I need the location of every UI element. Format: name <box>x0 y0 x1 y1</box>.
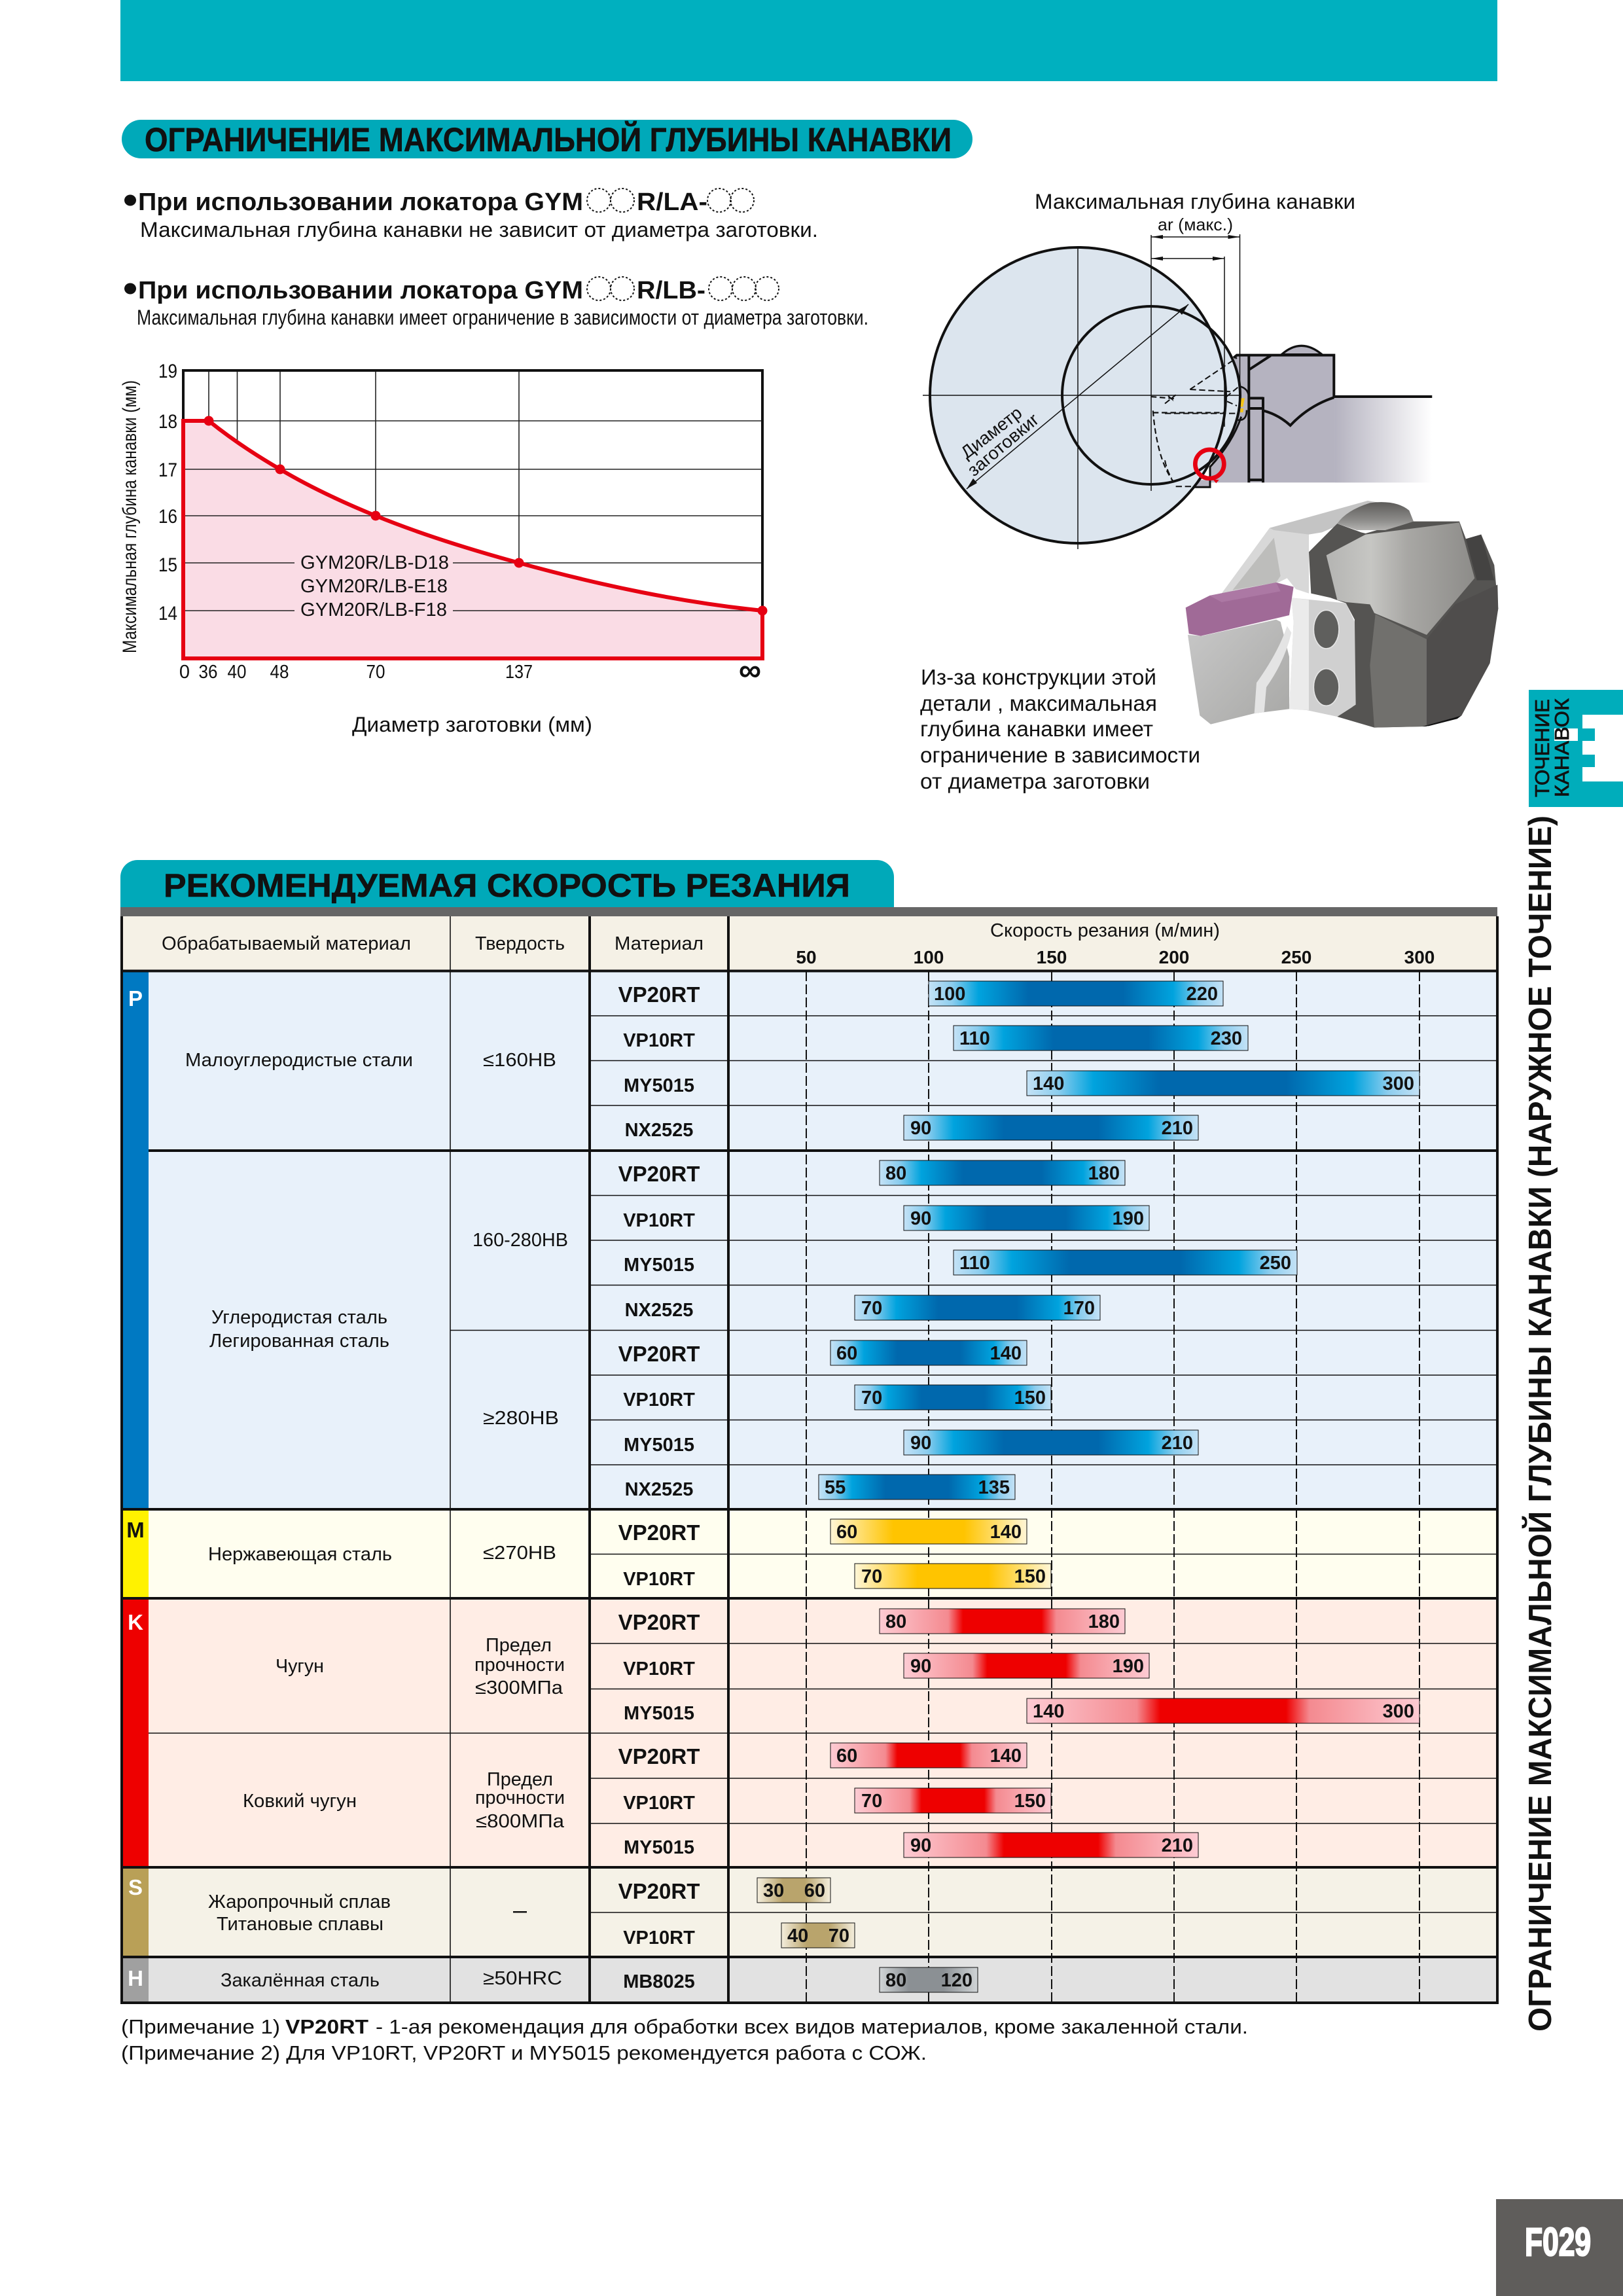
group strip: S <box>122 1867 149 1957</box>
row: NX2525 90-210: 90 <box>910 1118 931 1139</box>
text block: construction note: ограничение в зависимости <box>920 743 1200 767</box>
group strip: H <box>122 1957 149 2003</box>
row: S VP10RT 40-70 <box>623 1923 855 1948</box>
table header row: Скорость резания (м/мин) <box>990 920 1220 941</box>
material and hardness labels: Углеродистая сталь <box>211 1307 387 1328</box>
group strip: H: H <box>128 1966 143 1990</box>
row: S VP10RT 40-70: 70 <box>829 1926 849 1946</box>
table header row: 250 <box>1281 947 1311 967</box>
row: M VP10RT 70-150: 150 <box>1014 1566 1046 1587</box>
row: K MY5015 140-300 <box>624 1698 1419 1724</box>
row: K VP20RT 80-180: 80 <box>885 1611 906 1632</box>
chart: max groove depth vs workpiece diameter: GYM20R/LB-D18 <box>300 552 449 573</box>
row: S VP20RT 30-60: 60 <box>804 1880 825 1901</box>
row: MY5015 90-210 <box>624 1430 1198 1456</box>
table header row: 150 <box>1037 947 1067 967</box>
row: VP20RT 60-140: 60 <box>836 1343 857 1364</box>
row: K MY5015 90-210 <box>624 1833 1198 1858</box>
row: NX2525 70-170: NX2525 <box>625 1300 693 1321</box>
text block: construction note: глубина канавки имеет <box>920 717 1153 741</box>
row: NX2525 90-210: 210 <box>1162 1118 1193 1139</box>
row: MY5015 90-210: 90 <box>910 1433 931 1454</box>
vertical side title: ОГРАНИЧЕНИЕ МАКСИМАЛЬНОЙ ГЛУБИНЫ КАНАВКИ (НАРУЖНОЕ ТОЧЕНИЕ) <box>1522 816 1558 2032</box>
row: MY5015 90-210: 210 <box>1162 1433 1193 1454</box>
row: K VP10RT 70-150: 150 <box>1014 1791 1046 1812</box>
row: VP20RT 100-220: VP20RT <box>618 982 700 1007</box>
table header row: 200 <box>1159 947 1189 967</box>
row: K VP20RT 60-140: 60 <box>836 1746 857 1767</box>
notes <box>121 2015 1248 2064</box>
row: K VP10RT 70-150: 70 <box>861 1791 882 1812</box>
row: MY5015 140-300: 140 <box>1033 1073 1064 1094</box>
row: K VP10RT 90-190: VP10RT <box>623 1659 695 1679</box>
material and hardness labels: прочности <box>475 1787 565 1808</box>
top banner <box>120 0 1497 81</box>
text block: construction note: от диаметра заготовки <box>920 769 1150 793</box>
panel: K cast iron background <box>122 1598 1497 1867</box>
page number tab: F029 <box>1525 2220 1591 2264</box>
chart: max groove depth vs workpiece diameter: 36 <box>199 662 217 683</box>
material and hardness labels: 160-280HB <box>473 1230 568 1251</box>
heading: maximum groove depth limit: ОГРАНИЧЕНИЕ МАКСИМАЛЬНОЙ ГЛУБИНЫ КАНАВКИ <box>145 120 952 158</box>
table header row: 50 <box>796 947 817 967</box>
row: K VP20RT 80-180: 180 <box>1088 1611 1120 1632</box>
row: NX2525 55-135: NX2525 <box>625 1479 693 1500</box>
illustration: 3D holder <box>1186 501 1498 728</box>
group strip: K <box>122 1598 149 1867</box>
row: VP20RT 80-180 <box>618 1160 1125 1186</box>
row: MY5015 110-250: 110 <box>959 1253 990 1274</box>
text block: locator LA <box>124 188 818 242</box>
row: VP10RT 70-150 <box>623 1385 1051 1410</box>
chart: max groove depth vs workpiece diameter: GYM20R/LB-E18 <box>300 576 448 597</box>
panel: H hardened steel background <box>122 1957 1497 2003</box>
material and hardness labels: Малоуглеродистые стали <box>185 1050 413 1071</box>
material and hardness labels: Жаропрочный сплав <box>208 1892 391 1912</box>
row: MY5015 140-300 <box>624 1071 1419 1096</box>
row: NX2525 70-170: 170 <box>1063 1298 1095 1319</box>
row: K VP10RT 90-190: 90 <box>910 1656 931 1677</box>
chart: max groove depth vs workpiece diameter: 18 <box>158 411 177 433</box>
row: NX2525 55-135: 55 <box>825 1477 846 1498</box>
diagram: workpiece and holder: ar (макс.) <box>1158 215 1233 234</box>
row: M VP20RT 60-140: VP20RT <box>618 1520 700 1545</box>
row: MY5015 90-210: MY5015 <box>624 1435 694 1456</box>
chart: max groove depth vs workpiece diameter: 0 <box>179 662 190 683</box>
row: K VP10RT 70-150: VP10RT <box>623 1793 695 1814</box>
row: H MB8025 80-120: MB8025 <box>623 1971 695 1992</box>
material and hardness labels: прочности <box>474 1655 565 1676</box>
row: H MB8025 80-120: 120 <box>941 1970 972 1991</box>
row: VP20RT 100-220: 220 <box>1186 984 1218 1005</box>
row: K VP20RT 60-140 <box>618 1743 1027 1768</box>
text block: construction note <box>920 665 1200 793</box>
table header row: Обрабатываемый материал <box>162 933 411 954</box>
table: cutting speed <box>120 916 1499 2003</box>
row: MY5015 110-250 <box>624 1250 1297 1276</box>
table header row: Твердость <box>475 933 565 954</box>
page number tab <box>1496 2199 1623 2296</box>
material and hardness labels: Легированная сталь <box>209 1331 389 1352</box>
material and hardness labels: Предел <box>486 1635 552 1656</box>
group strip: M <box>122 1509 149 1598</box>
row: K MY5015 140-300: 300 <box>1383 1701 1414 1722</box>
chart: max groove depth vs workpiece diameter: 17 <box>158 459 177 481</box>
heading: recommended cutting speed <box>120 860 1497 916</box>
notes: (Примечание 2) Для VP10RT, VP20RT и MY5015 рекомендуется работа с СОЖ. <box>121 2041 927 2064</box>
material and hardness labels: Ковкий чугун <box>243 1791 357 1812</box>
row: K MY5015 140-300: 140 <box>1033 1701 1064 1722</box>
chart: max groove depth vs workpiece diameter: 40 <box>228 662 246 683</box>
row: NX2525 55-135 <box>625 1475 1015 1500</box>
row: M VP20RT 60-140 <box>618 1519 1027 1545</box>
side tab: grooving E <box>1529 690 1623 807</box>
chart: max groove depth vs workpiece diameter: 15 <box>158 554 177 576</box>
text block: locator LA: R/LA- <box>637 188 707 216</box>
row: K VP20RT 60-140: 140 <box>990 1746 1022 1767</box>
notes: (Примечание 1) <box>121 2015 280 2038</box>
text block: locator LB <box>124 277 868 329</box>
row: K MY5015 90-210: MY5015 <box>624 1837 694 1858</box>
row: VP10RT 90-190: VP10RT <box>623 1210 695 1231</box>
table header row <box>122 916 1497 971</box>
chart: max groove depth vs workpiece diameter: 14 <box>158 603 177 624</box>
table header row: 300 <box>1404 947 1435 967</box>
row: K VP10RT 70-150 <box>623 1788 1051 1814</box>
side tab: grooving E: КАНАВОК <box>1550 698 1573 797</box>
material and hardness labels: Нержавеющая сталь <box>208 1544 392 1565</box>
row: H MB8025 80-120: 80 <box>885 1970 906 1991</box>
row: K VP10RT 90-190: 190 <box>1113 1656 1144 1677</box>
material and hardness labels: ≤300МПа <box>475 1677 563 1698</box>
row: VP10RT 70-150: 70 <box>861 1388 882 1408</box>
row: S VP20RT 30-60: 30 <box>763 1880 784 1901</box>
row: S VP10RT 40-70: 40 <box>787 1926 808 1946</box>
row: M VP10RT 70-150 <box>623 1564 1051 1590</box>
chart: max groove depth vs workpiece diameter <box>119 361 767 736</box>
row: NX2525 70-170 <box>625 1295 1100 1321</box>
notes: VP20RT <box>285 2015 368 2038</box>
material and hardness labels: Титановые сплавы <box>217 1914 383 1935</box>
material and hardness labels: ≤800МПа <box>476 1811 565 1832</box>
table header row: Материал <box>615 933 704 954</box>
diagram: workpiece and holder: Диаметр <box>957 403 1026 463</box>
row: VP10RT 70-150: VP10RT <box>623 1390 695 1410</box>
chart: max groove depth vs workpiece diameter: Диаметр заготовки (мм) <box>352 713 592 736</box>
row: MY5015 110-250: MY5015 <box>624 1255 694 1276</box>
chart: max groove depth vs workpiece diameter: 70 <box>366 662 385 683</box>
material and hardness labels: ≥50HRC <box>483 1968 562 1989</box>
diagram: workpiece and holder: заготовкиr <box>964 410 1043 480</box>
group strip: M: M <box>126 1518 145 1542</box>
group strip: S: S <box>128 1875 143 1899</box>
text block: construction note: детали , максимальная <box>920 691 1157 715</box>
chart: max groove depth vs workpiece diameter: 19 <box>158 361 177 382</box>
chart: max groove depth vs workpiece diameter: 137 <box>505 662 533 683</box>
material and hardness labels: ≤160HB <box>483 1050 556 1071</box>
text block: locator LB: R/LB- <box>637 277 705 304</box>
row: MY5015 110-250: 250 <box>1260 1253 1291 1274</box>
row: VP10RT 110-230: VP10RT <box>623 1030 695 1051</box>
row: VP10RT 90-190: 90 <box>910 1208 931 1229</box>
chart: max groove depth vs workpiece diameter: 48 <box>270 662 289 683</box>
chart: max groove depth vs workpiece diameter: Максимальная глубина канавки (мм) <box>119 380 141 653</box>
panel: S alloys background <box>122 1867 1497 1957</box>
material and hardness labels: ≤270HB <box>483 1543 556 1564</box>
material and hardness labels: ≥280HB <box>483 1408 559 1429</box>
panel: M stainless background <box>122 1509 1497 1598</box>
row: VP20RT 80-180: 180 <box>1088 1163 1120 1184</box>
diagram: workpiece and holder <box>923 190 1432 549</box>
row: VP20RT 60-140 <box>618 1340 1027 1366</box>
row: M VP20RT 60-140: 60 <box>836 1522 857 1543</box>
row: H MB8025 80-120 <box>623 1967 978 1992</box>
row: K MY5015 90-210: 210 <box>1162 1835 1193 1856</box>
row: NX2525 55-135: 135 <box>978 1477 1010 1498</box>
row: S VP20RT 30-60: VP20RT <box>618 1879 700 1903</box>
text block: construction note: Из-за конструкции этой <box>921 665 1156 689</box>
notes: - 1-ая рекомендация для обработки всех видов материалов, кроме закаленной стали. <box>376 2015 1248 2038</box>
row: VP10RT 70-150: 150 <box>1014 1388 1046 1408</box>
row: VP20RT 60-140: 140 <box>990 1343 1022 1364</box>
heading: recommended cutting speed: РЕКОМЕНДУЕМАЯ СКОРОСТЬ РЕЗАНИЯ <box>164 867 850 904</box>
chart: max groove depth vs workpiece diameter: GYM20R/LB-F18 <box>300 600 447 620</box>
material and hardness labels: Предел <box>487 1769 553 1790</box>
group strip: K: K <box>128 1610 143 1634</box>
row: VP10RT 90-190 <box>623 1206 1149 1231</box>
row: K VP20RT 80-180 <box>618 1609 1125 1634</box>
row: VP20RT 100-220 <box>618 981 1223 1007</box>
material and hardness labels: Чугун <box>276 1656 324 1677</box>
row: K VP10RT 90-190 <box>623 1653 1149 1679</box>
row: K VP20RT 80-180: VP20RT <box>618 1610 700 1634</box>
row: NX2525 70-170: 70 <box>861 1298 882 1319</box>
row: NX2525 90-210: NX2525 <box>625 1120 693 1141</box>
chart: max groove depth vs workpiece diameter: 16 <box>158 506 177 528</box>
chart: max groove depth vs workpiece diameter: ∞ <box>739 653 761 688</box>
row: MY5015 140-300: MY5015 <box>624 1075 694 1096</box>
row: VP10RT 110-230: 230 <box>1211 1028 1242 1049</box>
material and hardness labels: Закалённая сталь <box>221 1970 380 1991</box>
text block: locator LA: При использовании локатора GYM <box>138 188 583 216</box>
row: VP10RT 90-190: 190 <box>1113 1208 1144 1229</box>
row: M VP10RT 70-150: 70 <box>861 1566 882 1587</box>
table header row: 100 <box>914 947 944 967</box>
row: VP20RT 100-220: 100 <box>934 984 965 1005</box>
text block: locator LB: При использовании локатора GYM <box>138 277 583 304</box>
text block: locator LB: Максимальная глубина канавки имеет ограничение в зависимости от диаметра заготовки. <box>137 306 868 329</box>
row: MY5015 140-300: 300 <box>1383 1073 1414 1094</box>
group strip: P <box>122 971 149 1509</box>
row: VP20RT 80-180: 80 <box>885 1163 906 1184</box>
diagram: workpiece and holder: Максимальная глубина канавки <box>1035 190 1355 213</box>
row: VP10RT 110-230: 110 <box>959 1028 990 1049</box>
group strip: P: P <box>128 986 143 1011</box>
row: VP20RT 80-180: VP20RT <box>618 1162 700 1186</box>
row: VP10RT 110-230 <box>623 1026 1248 1051</box>
material and hardness labels <box>185 1050 568 1991</box>
row: VP20RT 60-140: VP20RT <box>618 1342 700 1366</box>
panel: P steels background <box>122 971 1497 1509</box>
row: M VP20RT 60-140: 140 <box>990 1522 1022 1543</box>
side tab: grooving E: ТОЧЕНИЕ <box>1531 699 1554 797</box>
row: S VP20RT 30-60 <box>618 1878 830 1903</box>
row: K MY5015 90-210: 90 <box>910 1835 931 1856</box>
row: NX2525 90-210 <box>625 1115 1198 1141</box>
text block: locator LA: Максимальная глубина канавки не зависит от диаметра заготовки. <box>140 218 818 242</box>
row: S VP10RT 40-70: VP10RT <box>623 1928 695 1948</box>
row: K MY5015 140-300: MY5015 <box>624 1703 694 1724</box>
row: K VP20RT 60-140: VP20RT <box>618 1744 700 1768</box>
row: M VP10RT 70-150: VP10RT <box>623 1569 695 1590</box>
